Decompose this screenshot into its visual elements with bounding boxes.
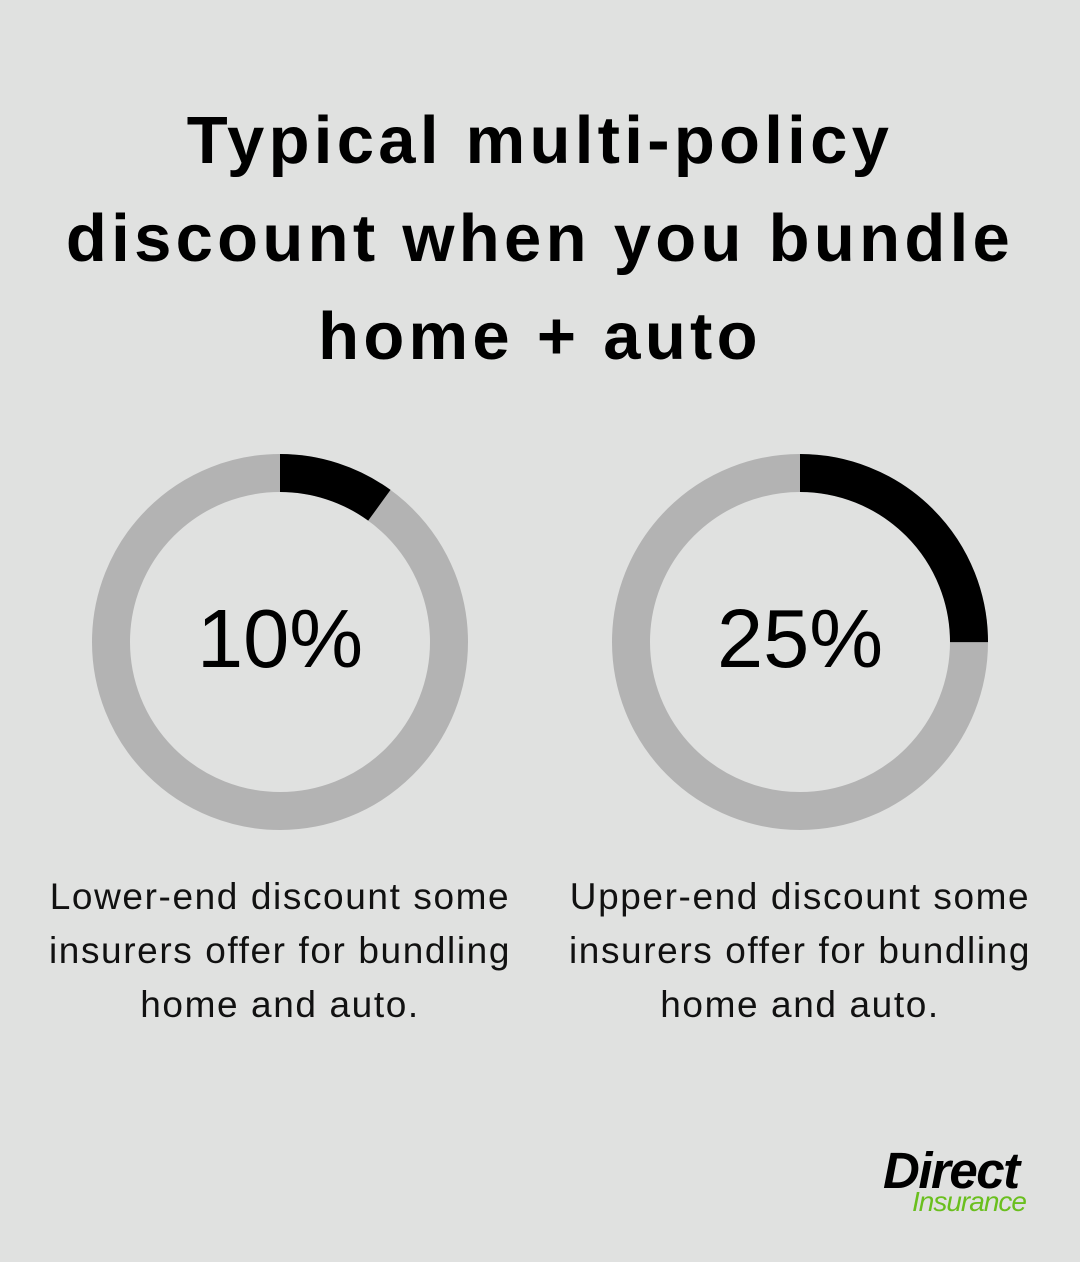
text: lower-end: Lower-end discount some insurers offer for bundling home and auto. [49, 876, 511, 1025]
donut: 25% [631, 473, 969, 811]
title: Typical multi-policy [187, 103, 893, 178]
donut: 10%: 10% [197, 592, 363, 685]
title: home + auto [318, 299, 762, 374]
logo: Direct [883, 1142, 1019, 1199]
text: upper-end: Upper-end discount some insurers offer for bundling home and auto. [569, 876, 1031, 1025]
donut: 10% [111, 473, 449, 811]
donut: 25%: 25% [717, 592, 883, 685]
title: discount when you bundle [66, 201, 1014, 276]
logo: Insurance [912, 1186, 1026, 1217]
title [66, 103, 1014, 374]
